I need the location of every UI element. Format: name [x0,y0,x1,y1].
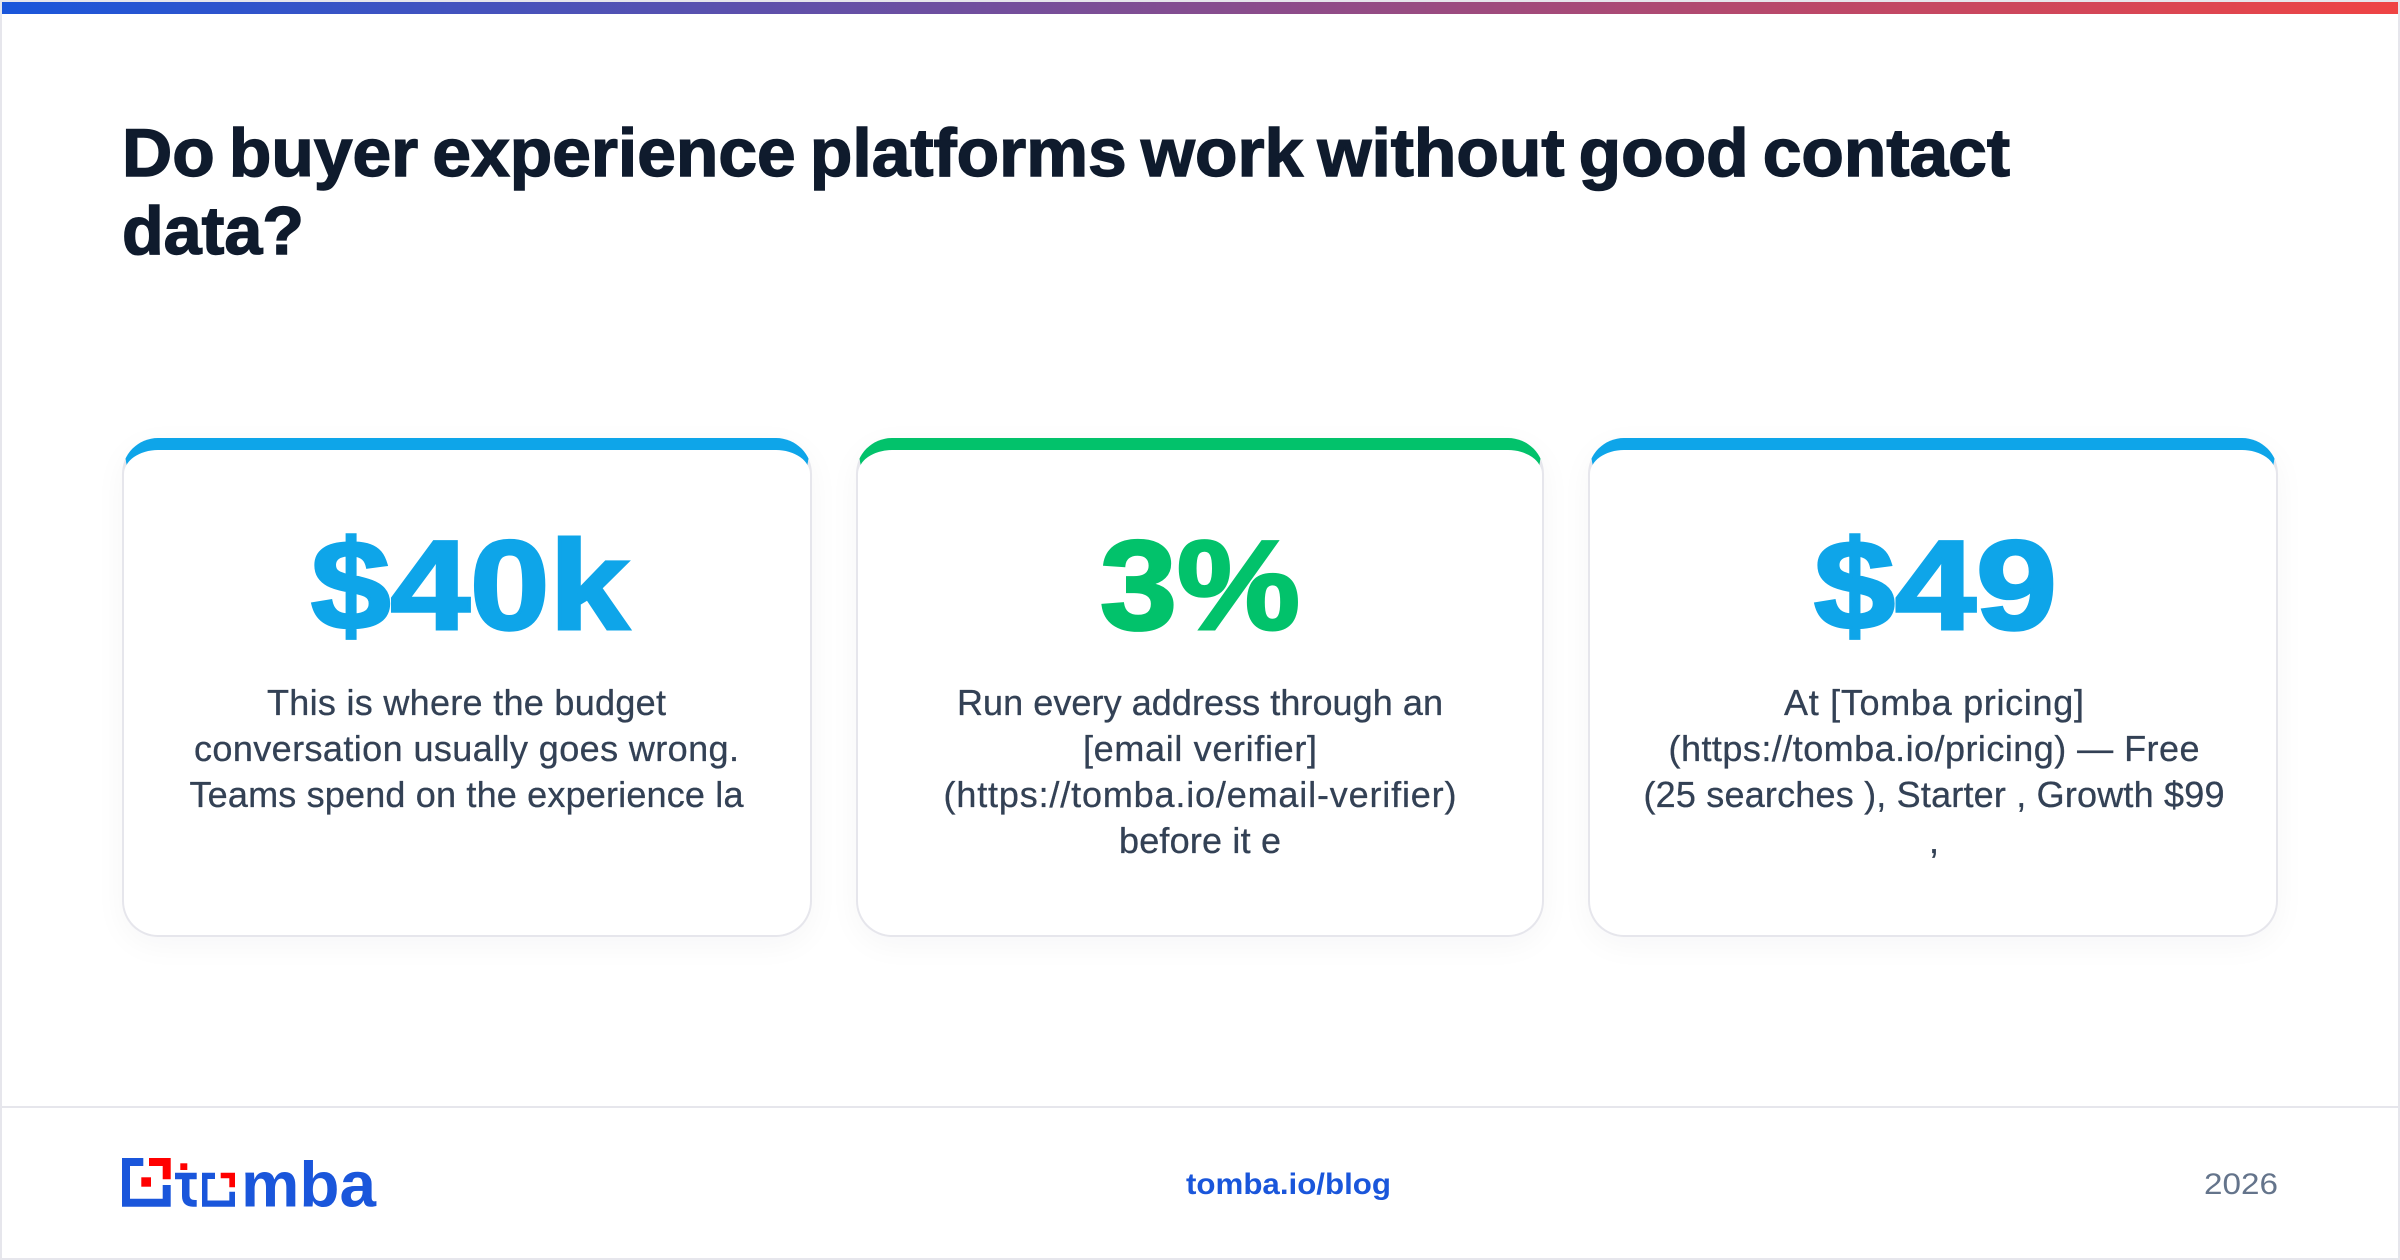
logo mark: square brackets [122,1158,171,1207]
title: Do buyer experience platforms work without good contact [122,115,2010,191]
description: email verifier: (https://tomba.io/email-verifier) [944,774,1456,815]
description: budget conversation: conversation usually goes wrong. [194,728,739,769]
top gradient bar [2,2,2398,14]
stat value: $40k: $40k [311,514,629,656]
description: budget conversation: Teams spend on the experience la [190,774,744,815]
description: Tomba pricing [1644,682,2224,861]
footer year: 2026 [2204,1168,2278,1201]
logo wordmark letters: mba [241,1149,376,1221]
description: email verifier: Run every address through an [957,682,1443,723]
footer link: tomba.io/blog [1186,1168,1391,1201]
description: Tomba pricing: , [1929,820,1939,861]
title [122,115,2010,269]
description: Tomba pricing: (https://tomba.io/pricing) — Free [1668,728,2200,769]
title: data? [122,193,304,269]
stat value: 3%: 3% [1100,514,1300,656]
description: Tomba pricing: (25 searches ), Starter , Growth $99 [1644,774,2224,815]
description: Tomba pricing: At [Tomba pricing] [1784,682,2084,723]
description: email verifier: before it e [1119,820,1281,861]
description: budget conversation: This is where the budget [267,682,666,723]
description: budget conversation [190,682,744,815]
description: email verifier: [email verifier] [1083,728,1317,769]
panel: $40k stat card [122,438,812,937]
footer divider [0,1106,2400,1108]
description: email verifier [944,682,1456,861]
stat value: $49: $49 [1814,514,2057,656]
panel: $49 stat card [1588,438,2278,937]
logo letter marks: t and o [175,1163,235,1207]
panel: 3% stat card [856,438,1544,937]
